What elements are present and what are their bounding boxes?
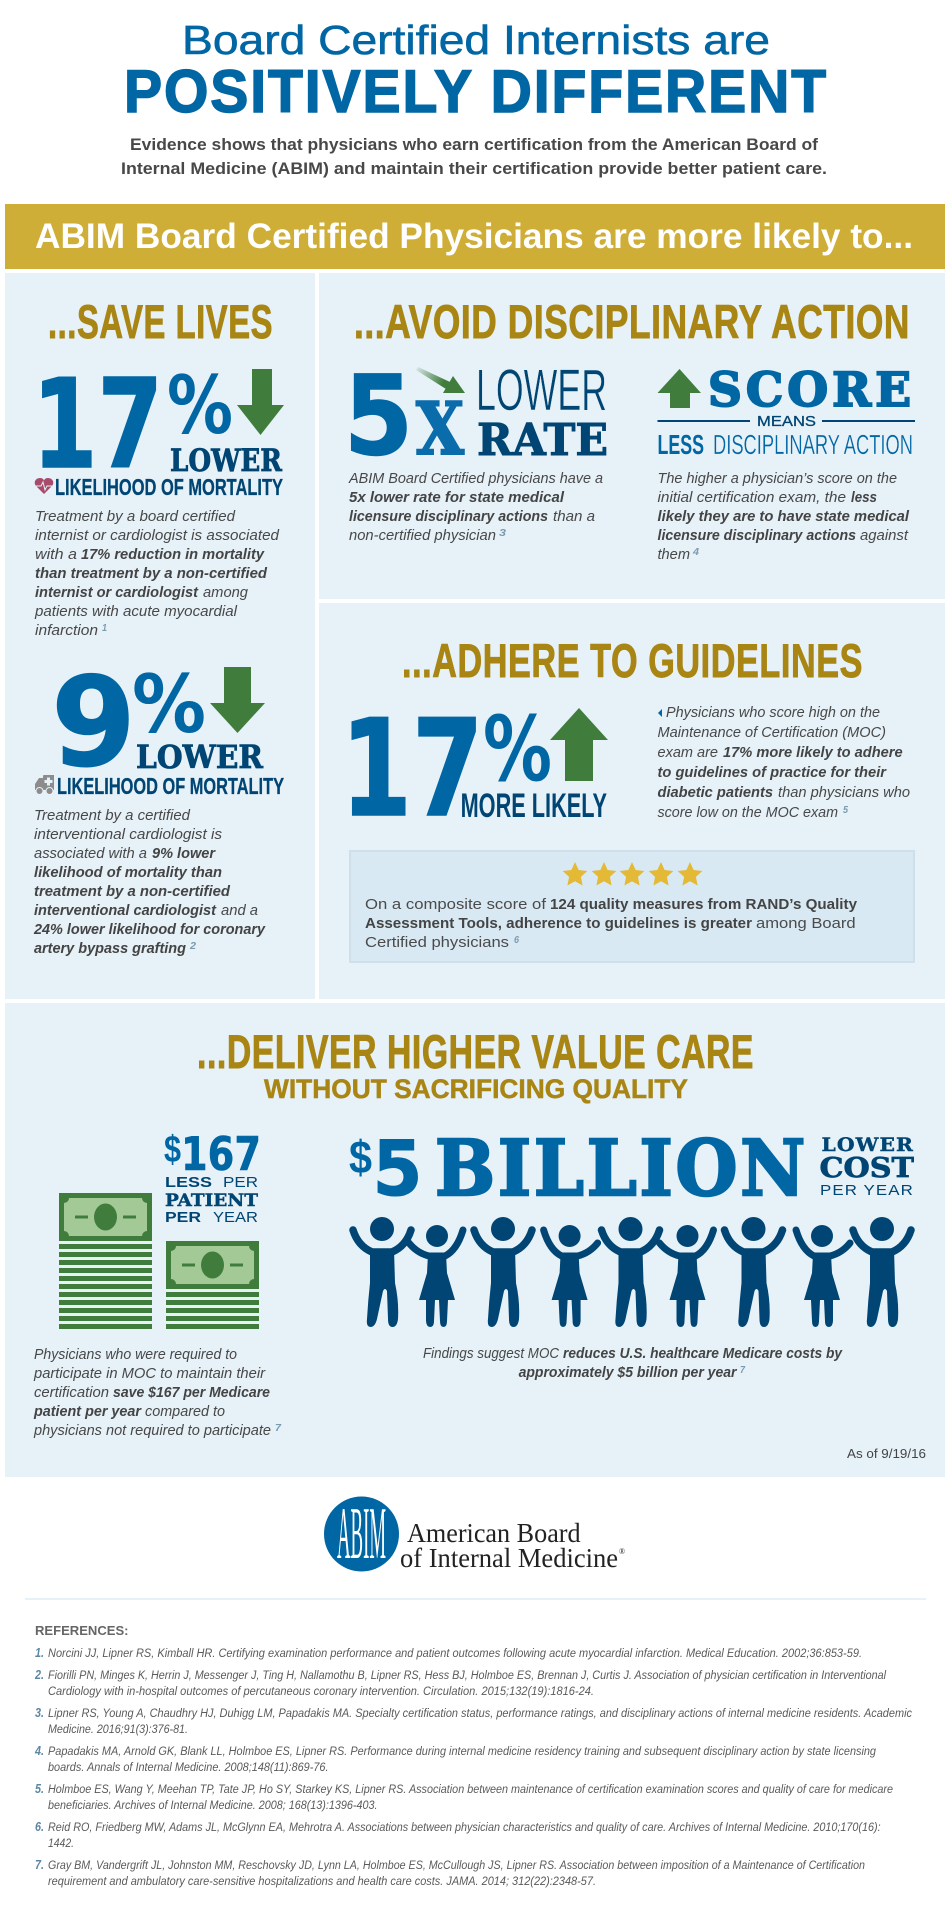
text: 167 dollars description: certification	[34, 1385, 109, 1401]
text: score description: initial certification exam, the	[658, 490, 846, 506]
text: 17 percent description: Treatment by a board certified	[35, 509, 236, 525]
stat: 17 percent lower: 17	[32, 354, 163, 497]
text: adherence description: than physicians who	[778, 785, 910, 801]
text: adherence description: to guidelines of practice for their	[658, 765, 887, 781]
text: 17 percent description: than treatment by a non-certified	[35, 566, 268, 582]
title	[124, 17, 828, 125]
stat: score means less disciplinary action: MEANS	[757, 414, 816, 430]
text: 9 percent description: 2	[189, 941, 196, 952]
stat: 9 percent lower: %	[132, 658, 206, 751]
text: 17 percent description: infarction	[35, 623, 98, 639]
logo: ABIM: ABIM	[337, 1493, 386, 1575]
reference list: 7.	[35, 1857, 44, 1872]
intro text	[121, 136, 827, 178]
reference list: Fiorilli PN, Minges K, Herrin J, Messenger J, Ting H, Nallamothu B, Lipner RS, Hess BJ, Holmboe ES, Brennan J, Curtis J. Association of physician certification in Interventional	[48, 1670, 886, 1682]
icon: heart	[35, 478, 53, 494]
text: 17 percent description: patients with acute myocardial	[34, 604, 238, 620]
text: adherence description: 17% more likely to adhere	[723, 745, 903, 761]
reference list: 1442.	[48, 1838, 74, 1850]
reference list: Holmboe ES, Wang Y, Meehan TP, Tate JP, Ho SY, Starkey KS, Lipner RS. Association between maintenance of certification examination scores and quality of care for medicare	[48, 1784, 893, 1796]
text: 5 billion description: Findings suggest MOC	[423, 1346, 559, 1362]
stat: 5 billion lower cost: BILLION	[435, 1124, 808, 1214]
reference list: Cardiology with in-hospital outcomes of percutaneous coronary intervention. Circulation. 2015;132(19):1816-24.	[48, 1686, 594, 1698]
text: 167 dollars description: 7	[275, 1423, 281, 1434]
stat: 5 billion lower cost: COST	[820, 1153, 914, 1184]
text: 5 billion description	[423, 1346, 843, 1381]
icon: ambulance	[35, 775, 54, 794]
stat: 5 billion lower cost: $	[349, 1131, 372, 1183]
reference list: requirement and ambulatory care-sensitive hospitalizations and health care costs. JAMA. 2014; 312(22):2348-57.	[48, 1876, 596, 1888]
text: score description: likely they are to have state medical	[658, 509, 910, 525]
stat: 17 percent more likely: 17	[340, 691, 484, 847]
icon: tall money stack	[59, 1193, 152, 1329]
stat: 167 dollars less: LESS	[165, 1175, 212, 1191]
text: 5x description: licensure disciplinary actions	[349, 509, 548, 525]
stat: score means less disciplinary action: LESS	[658, 429, 704, 460]
reference list: 2.	[34, 1667, 44, 1682]
text: 5x description: than a	[553, 509, 595, 525]
text: 167 dollars description: save $167 per Medicare	[113, 1385, 270, 1401]
text: 5x description: ABIM Board Certified physicians have a	[348, 471, 603, 487]
gold banner: ABIM Board Certified Physicians are more likely to...	[35, 216, 913, 256]
stat: 17 percent lower: LOWER	[170, 443, 282, 479]
panel: adhere to guidelines	[319, 603, 945, 999]
stat: 9 percent lower: 9	[51, 651, 136, 795]
stat: 5 billion lower cost: PER YEAR	[820, 1182, 914, 1199]
stat: score means less disciplinary action	[658, 363, 915, 460]
text: 167 dollars description: participate in MOC to maintain their	[33, 1366, 266, 1382]
text: 17 percent description: 1	[102, 623, 107, 634]
text: 5 billion description: reduces U.S. healthcare Medicare costs by	[563, 1346, 843, 1362]
text: 17 percent description: with a	[35, 547, 77, 563]
text: adherence description: Physicians who score high on the	[666, 705, 880, 721]
icon: row of people	[353, 1217, 911, 1327]
reference list: 4.	[34, 1743, 44, 1758]
text: 9 percent description: artery bypass grafting	[34, 941, 186, 957]
text: adherence description: 5	[843, 805, 848, 816]
stat: 17 percent more likely: MORE LIKELY	[461, 787, 607, 825]
icon: short money stack	[166, 1241, 259, 1329]
panel: save lives	[5, 273, 315, 999]
icon: five stars	[563, 862, 702, 886]
intro text: Evidence shows that physicians who earn certification from the American Board of	[130, 136, 819, 154]
stat: 5x lower rate: X	[416, 386, 464, 471]
text: composite score description	[365, 897, 857, 951]
stat: 17 percent more likely	[340, 691, 607, 847]
stat: 9 percent lower	[51, 651, 263, 795]
references heading: REFERENCES:	[35, 1623, 128, 1638]
stat: 17 percent lower	[32, 354, 282, 497]
stat: 167 dollars less: PER	[165, 1210, 202, 1226]
text: 9 percent description	[33, 808, 266, 957]
stat: 167 dollars less	[164, 1127, 261, 1226]
stat: 5x lower rate: 5	[344, 352, 413, 480]
label: likelihood of mortality: LIKELIHOOD OF MORTALITY	[55, 474, 283, 500]
gold banner	[5, 204, 945, 269]
text: 5 billion description: 7	[740, 1365, 745, 1376]
text: 5x description: 5x lower rate for state medical	[349, 490, 565, 506]
heading: deliver higher value care	[197, 1026, 754, 1104]
reference list: Norcini JJ, Lipner RS, Kimball HR. Certifying examination performance and patient outcomes following acute myocardial infarction. Medical Education. 2002;36:853-59.	[48, 1648, 862, 1660]
text: composite score description: Assessment Tools, adherence to guidelines is greater	[365, 916, 752, 932]
text: composite score description: 6	[514, 935, 519, 946]
text: 5x description: 3	[499, 528, 507, 539]
callout: composite score	[350, 851, 914, 962]
reference list: Reid RO, Friedberg MW, Adams JL, McGlynn EA, Mehrotra A. Associations between physician characteristics and quality of care. Archives of Internal Medicine. 2010;170(16):	[48, 1822, 881, 1834]
stat: 167 dollars less: 167	[181, 1127, 261, 1181]
text: 167 dollars description: Physicians who were required to	[34, 1347, 237, 1363]
text: adherence description	[658, 705, 910, 821]
reference list: boards. Annals of Internal Medicine. 2008;148(11):869-76.	[48, 1762, 328, 1774]
text: 167 dollars description: physicians not required to participate	[33, 1423, 271, 1439]
text: adherence description: Maintenance of Certification (MOC)	[658, 725, 886, 741]
stat: 167 dollars less: YEAR	[213, 1210, 258, 1226]
text: score description: licensure disciplinary actions	[658, 528, 856, 544]
reference list	[34, 1645, 912, 1888]
text: composite score description: Certified physicians	[365, 935, 509, 951]
text: adherence description: exam are	[658, 745, 718, 761]
stat: 5x lower rate: RATE	[477, 415, 608, 466]
stat: 167 dollars less: PER	[223, 1175, 258, 1191]
text: 9 percent description: treatment by a non-certified	[34, 884, 231, 900]
text: 9 percent description: associated with a	[34, 846, 147, 862]
title: POSITIVELY DIFFERENT	[124, 58, 828, 125]
text: 9 percent description: and a	[221, 903, 258, 919]
arrow: diagonal gradient	[416, 367, 465, 393]
reference list: 3.	[35, 1705, 44, 1720]
text: 5x description	[348, 471, 603, 544]
reference list: beneficiaries. Archives of Internal Medicine. 2008; 168(13):1396-403.	[48, 1800, 378, 1812]
text: 167 dollars description	[33, 1347, 281, 1439]
text: 167 dollars description: compared to	[145, 1404, 225, 1420]
intro text: Internal Medicine (ABIM) and maintain their certification provide better patient care.	[121, 160, 827, 178]
stat: 167 dollars less: PATIENT	[165, 1191, 258, 1211]
references	[34, 1623, 912, 1888]
text: 9 percent description: interventional cardiologist	[34, 903, 217, 919]
text: 167 dollars description: patient per year	[33, 1404, 142, 1420]
title: Board Certified Internists are	[182, 17, 770, 63]
heading: deliver higher value care: WITHOUT SACRIFICING QUALITY	[264, 1074, 688, 1104]
text: 5 billion description: approximately $5 billion per year	[519, 1365, 738, 1381]
text: 9 percent description: interventional cardiologist is	[34, 827, 222, 843]
divider	[25, 1598, 926, 1600]
reference list: 5.	[35, 1781, 44, 1796]
text: score description: The higher a physician’s score on the	[658, 471, 897, 487]
text: 9 percent description: 9% lower	[152, 846, 216, 862]
stat: 5x lower rate: LOWER	[476, 358, 607, 423]
stat: 167 dollars less: $	[164, 1129, 181, 1171]
text: 17 percent description	[34, 509, 280, 639]
text: 9 percent description: Treatment by a certified	[34, 808, 191, 824]
arrow: down	[210, 667, 265, 733]
text: composite score description: On a composite score of	[365, 897, 547, 913]
text: 17 percent description: among	[203, 585, 248, 601]
text: adherence description: score low on the MOC exam	[658, 805, 838, 821]
text: score description: them	[658, 547, 690, 563]
text: score description	[658, 471, 910, 563]
stat: 9 percent lower: LOWER	[136, 738, 263, 776]
text: score description: less	[851, 490, 877, 506]
text: 17 percent description: internist or cardiologist is associated	[35, 528, 280, 544]
text: adherence description: diabetic patients	[658, 785, 773, 801]
reference list: Lipner RS, Young A, Chaudhry HJ, Duhigg LM, Papadakis MA. Specialty certification status, performance ratings, and disciplinary actions of internal medicine residents. Academic	[48, 1708, 912, 1720]
reference list: 6.	[35, 1819, 44, 1834]
text: score description: 4	[692, 547, 699, 558]
logo: ABIM: ®	[619, 1547, 625, 1556]
text: 17 percent description: internist or cardiologist	[35, 585, 199, 601]
text: 9 percent description: likelihood of mortality than	[34, 865, 222, 881]
stat: 5 billion lower cost: 5	[372, 1124, 422, 1213]
logo: ABIM: of Internal Medicine	[400, 1543, 618, 1573]
date note: As of 9/19/16	[847, 1446, 926, 1461]
text: 17 percent description: 17% reduction in mortality	[81, 547, 265, 563]
panel: deliver higher value care	[5, 1003, 945, 1477]
text: 5x description: non-certified physician	[349, 528, 496, 544]
stat: 5 billion lower cost: LOWER	[822, 1134, 914, 1156]
stat: 17 percent lower: %	[167, 359, 233, 452]
panel: avoid disciplinary action	[319, 273, 945, 599]
reference list: 1.	[35, 1645, 44, 1660]
heading: save lives: ...SAVE LIVES	[48, 296, 273, 349]
arrow: up	[550, 708, 608, 781]
text: composite score description: 124 quality measures from RAND’s Quality	[550, 897, 857, 913]
text: score description: against	[860, 528, 909, 544]
text: composite score description: among Board	[756, 916, 856, 932]
reference list: Medicine. 2016;91(3):376-81.	[48, 1724, 188, 1736]
arrow: down	[237, 369, 284, 435]
stat: score means less disciplinary action: SCORE	[708, 363, 915, 418]
logo: ABIM	[324, 1493, 625, 1575]
reference list: Papadakis MA, Arnold GK, Blank LL, Holmboe ES, Lipner RS. Performance during internal medicine residency training and subsequent disciplinary action by state licensing	[48, 1746, 877, 1758]
label: likelihood of mortality: LIKELIHOOD OF MORTALITY	[57, 773, 284, 799]
logo: ABIM: American Board	[407, 1518, 581, 1548]
arrow: up	[658, 369, 701, 408]
stat: 5x lower rate	[344, 352, 608, 480]
stat: 17 percent more likely: %	[483, 697, 552, 802]
text: 9 percent description: 24% lower likelihood for coronary	[33, 922, 266, 938]
reference list: Gray BM, Vandergrift JL, Johnston MM, Reschovsky JD, Lynn LA, Holmboe ES, McCullough JS, Lipner RS. Association between imposition of a Maintenance of Certification	[48, 1860, 865, 1872]
